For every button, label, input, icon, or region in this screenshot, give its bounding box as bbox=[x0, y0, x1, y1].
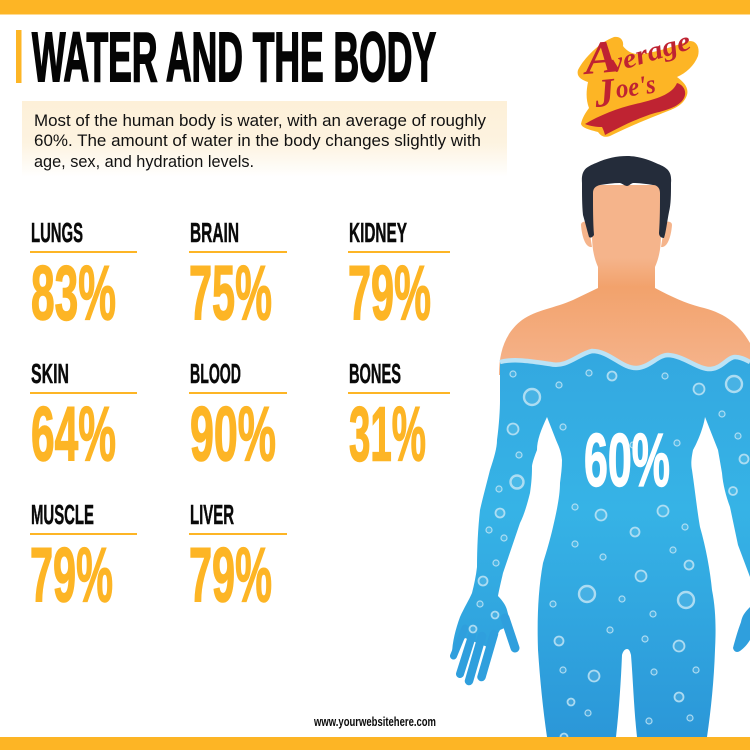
stat: skin bbox=[30, 358, 137, 478]
stat: lungs: 83% bbox=[31, 250, 116, 336]
intro text block: 60%. The amount of water in the body changes slightly with bbox=[34, 131, 481, 150]
stat: kidney: KIDNEY bbox=[349, 217, 407, 248]
stat: liver: 79% bbox=[189, 532, 272, 618]
stat: brain: BRAIN bbox=[190, 217, 239, 248]
bottom bar bbox=[0, 737, 750, 750]
stat: skin: 64% bbox=[31, 392, 116, 478]
logo: Average Joe's: oe's bbox=[614, 69, 657, 104]
stat: bones: 31% bbox=[349, 392, 426, 478]
water bubbles bbox=[470, 370, 748, 740]
stat: bones bbox=[348, 358, 450, 478]
bottom bar overlap bbox=[0, 737, 750, 750]
intro text block: Most of the human body is water, with an average of roughly bbox=[34, 111, 486, 130]
stat: brain: 75% bbox=[189, 250, 272, 336]
human figure bbox=[452, 156, 750, 740]
stat: liver: LIVER bbox=[190, 499, 234, 530]
stat: bones: BONES bbox=[349, 358, 401, 389]
stat: kidney: 79% bbox=[348, 250, 431, 336]
stat: muscle: 79% bbox=[30, 532, 113, 618]
right hand water fill bbox=[733, 607, 750, 652]
logo: Average Joe's: A bbox=[579, 30, 621, 84]
stat: liver bbox=[189, 499, 287, 618]
stat: muscle bbox=[30, 499, 137, 618]
stat: brain bbox=[189, 217, 287, 336]
stat: lungs: LUNGS bbox=[31, 217, 83, 248]
logo: Average Joe's: J bbox=[591, 69, 619, 116]
logo: Average Joe's: verage bbox=[605, 25, 694, 79]
stat: blood: BLOOD bbox=[190, 358, 241, 389]
logo: Average Joe's bbox=[578, 25, 699, 137]
stat: muscle: MUSCLE bbox=[31, 499, 94, 530]
title accent bar bbox=[16, 30, 22, 83]
water surface wave bbox=[500, 351, 750, 369]
figure hair bbox=[582, 156, 671, 238]
intro text block: age, sex, and hydration levels. bbox=[34, 152, 254, 171]
hand fingers bbox=[454, 618, 515, 681]
website url: www.yourwebsitehere.com bbox=[313, 715, 436, 729]
body percentage: 60% bbox=[584, 418, 670, 502]
stat: blood bbox=[189, 358, 287, 478]
stat: skin: SKIN bbox=[31, 358, 69, 389]
top bar bbox=[0, 0, 750, 14]
stat: kidney bbox=[348, 217, 450, 336]
figure skin: head, neck and shoulders bbox=[499, 185, 750, 375]
intro text block bbox=[22, 101, 507, 177]
stat: lungs bbox=[30, 217, 137, 336]
figure water fill bbox=[452, 351, 750, 737]
stat: blood: 90% bbox=[190, 392, 276, 478]
